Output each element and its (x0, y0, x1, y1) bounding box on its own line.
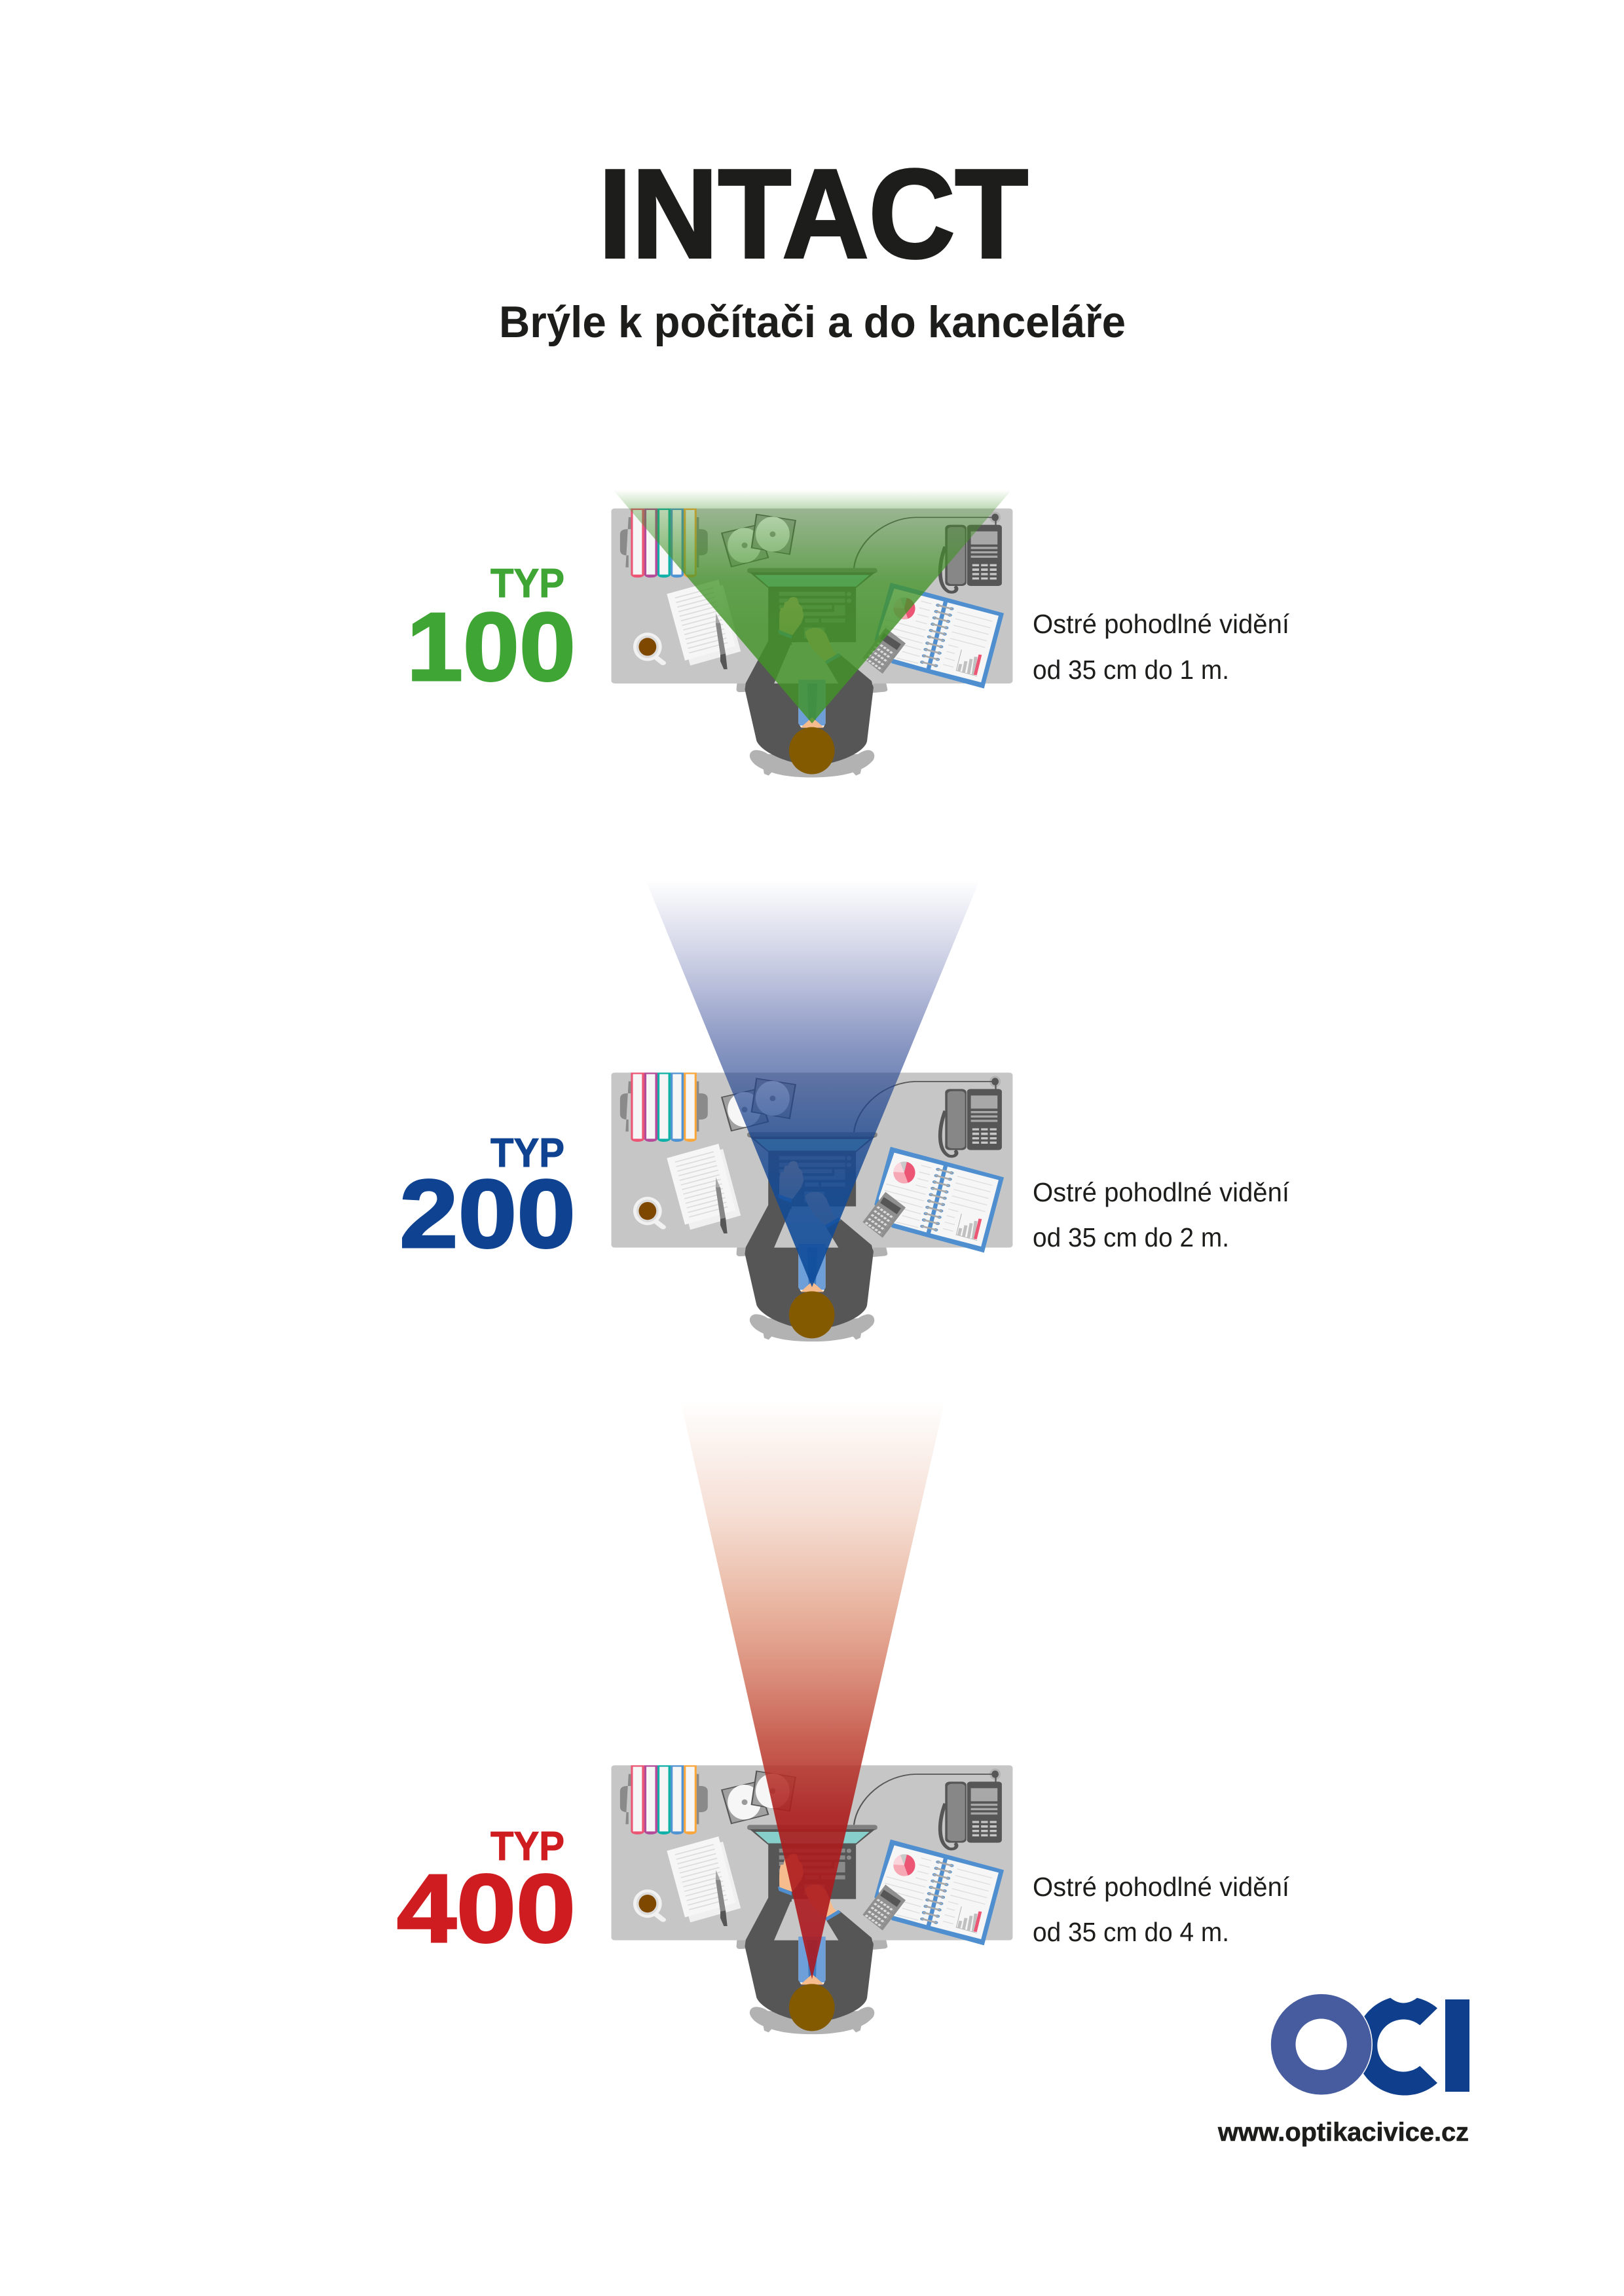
icon: coffee cup (633, 632, 663, 663)
icon: books (620, 1765, 708, 1834)
description: typ 100: od 35 cm do 1 m. (1033, 655, 1229, 685)
website url: www.optikacivice.cz (1217, 2118, 1469, 2147)
vision cone: red (680, 1400, 945, 1979)
chair (737, 1940, 887, 2034)
description: typ 400 (1033, 1872, 1290, 1947)
icon: laptop (747, 1825, 877, 1899)
panel: typ 100 (407, 490, 1290, 777)
description: typ 100: Ostré pohodlné vidění (1033, 609, 1290, 639)
title: INTACT (599, 143, 1028, 284)
label: typ 200: TYP (490, 1131, 564, 1176)
desk (611, 1765, 1012, 1941)
person (745, 1200, 874, 1338)
icon: discs (722, 1078, 796, 1131)
hands (768, 1161, 841, 1228)
icon: notebook (874, 1840, 1004, 1945)
description: typ 100 (1033, 609, 1290, 685)
hands (768, 1853, 841, 1921)
icon: calculator (862, 628, 906, 674)
icon: telephone (940, 1781, 1002, 1849)
icon: telephone (940, 525, 1002, 592)
icon: calculator (862, 1192, 906, 1238)
phone cable (854, 1076, 1001, 1132)
label: typ 400: TYP (490, 1824, 564, 1869)
label: typ 100: 100 (407, 593, 576, 701)
desk scene: typ 100 (611, 509, 1012, 777)
icon: laptop (747, 1132, 877, 1207)
panel: typ 400 (397, 1400, 1290, 2034)
person (745, 636, 874, 774)
icon: calculator (862, 1885, 906, 1931)
vision cone: green (613, 490, 1012, 723)
description: typ 400: od 35 cm do 4 m. (1033, 1917, 1229, 1947)
icon: discs (722, 1771, 796, 1823)
label: typ 100: TYP (490, 561, 564, 606)
icon: papers and pen (667, 1836, 741, 1926)
label: typ 400: 400 (397, 1855, 576, 1963)
description: typ 200: Ostré pohodlné vidění (1033, 1177, 1290, 1207)
icon: coffee cup (633, 1889, 663, 1920)
label: typ 200: 200 (399, 1160, 576, 1268)
icon: notebook (874, 583, 1004, 689)
description: typ 200: od 35 cm do 2 m. (1033, 1222, 1229, 1252)
person (745, 1893, 874, 2031)
desk scene: typ 400 (611, 1765, 1012, 2034)
hands (768, 597, 841, 664)
icon: coffee cup (633, 1197, 663, 1227)
icon: books (620, 509, 708, 577)
icon: books (620, 1072, 708, 1142)
phone cable (854, 512, 1001, 568)
panel: typ 200 (399, 880, 1290, 1341)
desk (611, 509, 1012, 683)
desk (611, 1072, 1012, 1248)
description: typ 200 (1033, 1177, 1290, 1252)
icon: notebook (874, 1147, 1004, 1252)
icon: telephone (940, 1089, 1002, 1156)
icon: discs (722, 515, 796, 567)
desk scene: typ 200 (611, 1072, 1012, 1341)
vision cone: blue (646, 880, 980, 1287)
chair (737, 1247, 887, 1341)
chair (737, 683, 887, 777)
icon: papers and pen (667, 579, 741, 669)
icon: papers and pen (667, 1144, 741, 1233)
phone cable (854, 1768, 1001, 1825)
icon: laptop (747, 568, 877, 642)
logo: OCI (1283, 1998, 1469, 2096)
subtitle: Brýle k počítači a do kanceláře (499, 297, 1126, 347)
description: typ 400: Ostré pohodlné vidění (1033, 1872, 1290, 1902)
